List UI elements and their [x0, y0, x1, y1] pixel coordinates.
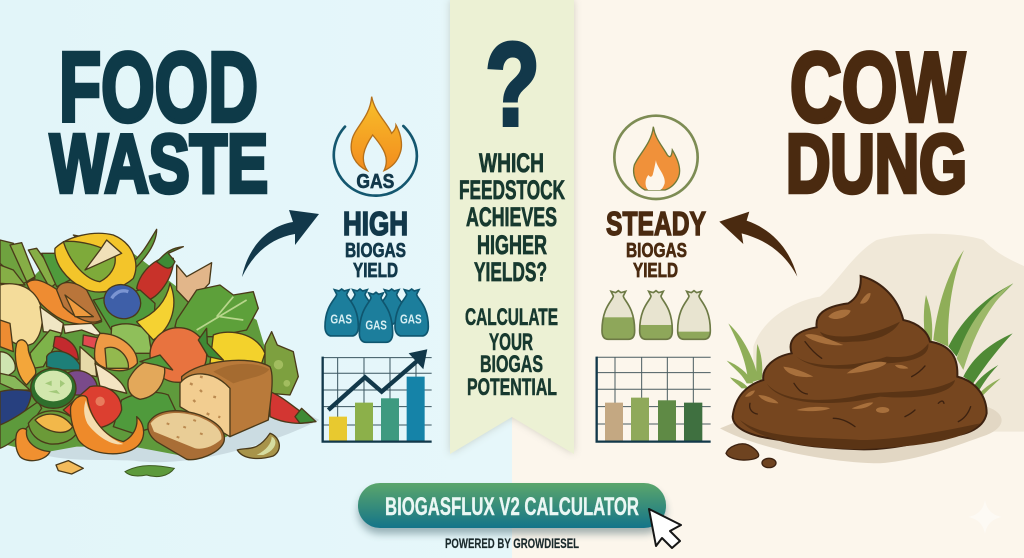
button: biogasflux v2 calculator: BIOGASFLUX V2 CALCULATOR	[385, 493, 639, 521]
call to action text: YOUR	[489, 329, 533, 356]
icon: gas bags high	[325, 289, 428, 342]
call to action text	[465, 304, 558, 401]
question text: HIGHER	[477, 230, 547, 260]
title: cow dung	[786, 32, 967, 210]
heading: steady biogas yield: BIOGAS	[626, 240, 687, 262]
arrow: cow dung to steady yield	[719, 212, 797, 277]
icon: gas bags high: GAS	[365, 317, 387, 332]
icon: gas bags steady	[598, 290, 714, 342]
title: food waste: WASTE	[50, 117, 268, 210]
question text: FEEDSTOCK	[459, 175, 565, 205]
call to action text: BIOGAS	[480, 351, 543, 378]
title: food waste	[50, 32, 268, 210]
question text: ACHIEVES	[466, 202, 557, 232]
chart: rising biogas yield	[323, 349, 432, 442]
title: cow dung: DUNG	[786, 117, 967, 210]
icon: high gas flame in circle: GAS	[356, 170, 394, 193]
question text: WHICH	[479, 148, 544, 178]
title: food waste: FOOD	[59, 32, 258, 142]
call to action text: CALCULATE	[465, 304, 558, 331]
heading: high biogas yield: BIOGAS	[345, 240, 406, 262]
text: powered by growdiesel: POWERED BY GROWDIESEL	[445, 536, 579, 551]
call to action text: POTENTIAL	[467, 374, 557, 401]
icon: mouse cursor	[649, 509, 681, 548]
illustration: food waste pile	[0, 229, 319, 477]
chart: steady biogas yield	[597, 357, 711, 442]
icon: gas bags high: GAS	[400, 311, 422, 326]
icon: steady flame in circle	[614, 116, 698, 199]
heading: steady biogas yield: YIELD	[633, 260, 678, 282]
arrow: food waste to high yield	[242, 210, 319, 277]
title: cow dung: COW	[790, 32, 965, 142]
question text	[459, 148, 565, 287]
illustration: dung pile with grass	[720, 234, 1024, 468]
heading: steady biogas yield	[606, 205, 706, 282]
button: biogasflux v2 calculator	[358, 483, 666, 534]
panel: cow dung background	[512, 0, 1024, 558]
icon: high gas flame in circle	[334, 97, 417, 196]
icon: sparkle watermark	[968, 500, 1002, 534]
panel: food waste background	[0, 0, 512, 558]
question mark: ?	[485, 19, 540, 151]
heading: high biogas yield: YIELD	[353, 260, 398, 282]
heading: steady biogas yield: STEADY	[606, 205, 706, 242]
question text: YIELDS?	[474, 257, 547, 287]
heading: high biogas yield: HIGH	[343, 205, 408, 242]
ribbon: central question	[450, 0, 574, 454]
icon: gas bags high: GAS	[330, 311, 352, 326]
heading: high biogas yield	[343, 205, 408, 282]
